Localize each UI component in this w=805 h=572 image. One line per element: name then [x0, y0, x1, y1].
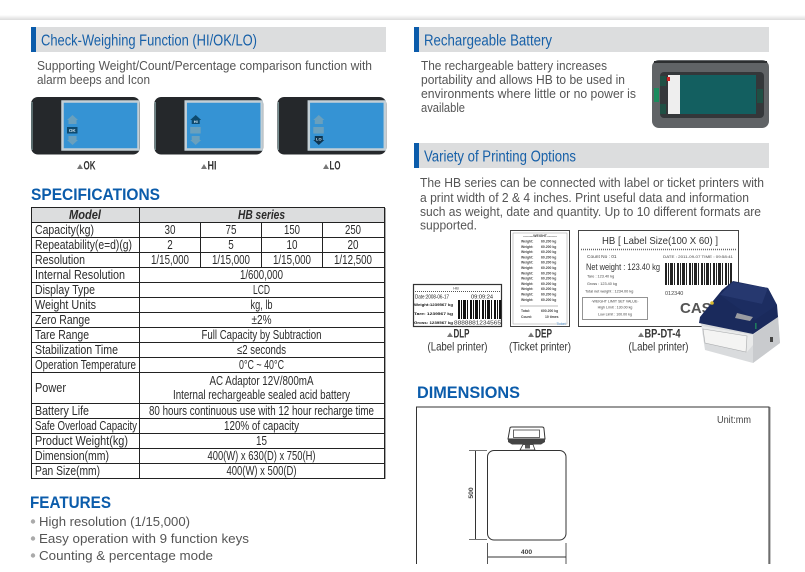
row: resolution: 1/12,500: [334, 253, 372, 267]
row: capacity: [35, 223, 361, 237]
sample: DEP ticket: Weight:: [521, 282, 533, 286]
icon: LO indicator inactive: [67, 136, 78, 145]
text block: battery description: available: [421, 101, 465, 115]
text block: printing description: supported.: [420, 218, 477, 232]
row: power: Internal rechargeable sealed acid battery: [173, 388, 351, 402]
row: stabilization time: ≤2 seconds: [237, 343, 286, 357]
sample: DEP ticket: 600.200 kg: [541, 309, 558, 313]
row: repeatability: 5: [228, 238, 234, 252]
row: display type: Display Type: [35, 283, 95, 297]
row: product weight: 15: [256, 434, 267, 448]
sample: DEP ticket: Weight:: [521, 266, 533, 270]
sample: DEP ticket: [510, 230, 570, 326]
text block: battery description: portability and allows HB to be used in: [421, 73, 625, 87]
sample: HB label: DATE : 2011-09-07 TIME : 09:58:41: [663, 255, 733, 259]
sample: DEP ticket: ---------WEIGHT---------: [523, 234, 557, 238]
sample: DEP ticket: 60.200 kg: [541, 266, 556, 270]
text block: printing description: [420, 176, 764, 232]
row: product weight: Product Weight(kg): [35, 434, 128, 448]
caption: DEP: DEP: [535, 326, 552, 340]
text block: check-weighing description: [37, 59, 372, 87]
sample: DEP ticket: Weight:: [521, 245, 533, 249]
row: repeatability: 10: [286, 238, 298, 252]
row: safe overload capacity: Safe Overload Capacity: [35, 419, 138, 433]
sample: DEP ticket: 60.200 kg: [541, 287, 556, 291]
caption: BP-DT-4: (Label printer): [628, 340, 689, 354]
sample: DEP ticket: Weight:: [521, 287, 533, 291]
sample: HB label: CAS: [680, 300, 712, 317]
row: battery life: [35, 404, 374, 418]
row: power: Power: [35, 381, 66, 395]
icon: OK indicator inactive: [313, 127, 324, 134]
row: safe overload capacity: 120% of capacity: [224, 419, 300, 433]
sample: HB label: [578, 230, 738, 326]
sample: DEP ticket: Weight:: [521, 298, 533, 302]
icon: LO indicator active: LO: [316, 136, 322, 142]
table header row: Model: [69, 208, 101, 222]
sample: DEP ticket: 60.200 kg: [541, 261, 556, 265]
sample: DEP ticket: 60.200 kg: [541, 282, 556, 286]
row: capacity: 30: [164, 223, 176, 237]
sample: HB label: High Limit : 130.00 kg: [598, 306, 632, 310]
caption: HI: [201, 158, 216, 172]
heading: variety of printing options: [414, 143, 769, 168]
sample: DEP ticket: Ticket: [556, 322, 566, 326]
row: pan size: [35, 464, 296, 478]
row: resolution: 1/15,000: [273, 253, 311, 267]
heading: check-weighing function: Check-Weighing Function (HI/OK/LO): [41, 32, 257, 50]
row: internal resolution: [35, 268, 283, 282]
row: internal resolution: Internal Resolution: [35, 268, 125, 282]
row: power: AC Adaptor 12V/800mA: [210, 374, 314, 388]
heading: specifications: SPECIFICATIONS: [31, 186, 160, 204]
row: repeatability: 2: [167, 238, 173, 252]
sample: DLP label: Gross: 1239567 kg: [414, 320, 454, 325]
row: dimension: [35, 449, 316, 463]
scale pan outline: [488, 450, 566, 540]
heading: rechargeable battery: Rechargeable Battery: [424, 32, 552, 50]
sample: DLP label: Date:2008-06-17: [415, 294, 449, 300]
list: features: Counting & percentage mode: [39, 549, 213, 563]
icon: OK indicator active: OK: [69, 128, 76, 133]
caption: OK: [77, 158, 96, 172]
caption: DEP: (Ticket printer): [509, 340, 571, 354]
row: resolution: 1/15,000: [151, 253, 189, 267]
sample: HB label: HB [ Label Size(100 X 60) ]: [602, 235, 718, 247]
sample: DEP ticket: Weight:: [521, 255, 533, 259]
row: capacity: Capacity(kg): [35, 223, 94, 237]
sample: DEP ticket: 60.200 kg: [541, 245, 556, 249]
row: resolution: [35, 253, 372, 267]
sample: DLP label: Tare: 1239567 kg: [414, 311, 454, 316]
row: capacity: 75: [226, 223, 237, 237]
text block: printing description: The HB series can be connected with label or ticket printers with: [420, 176, 764, 190]
row: pan size: Pan Size(mm): [35, 464, 100, 478]
sample: HB label: Net weight : 123.40 kg: [586, 262, 660, 272]
specifications table: [31, 207, 386, 479]
row: repeatability: Repeatability(e=d)(g): [35, 238, 132, 252]
caption: OK: OK: [84, 158, 96, 172]
sample: DEP ticket: Weight:: [521, 250, 533, 254]
text block: printing description: a print width of 2 & 4 inches. Print useful data and information: [420, 191, 749, 205]
icon: HI indicator inactive: [67, 115, 78, 124]
sample: DEP ticket: 60.200 kg: [541, 277, 556, 281]
row: resolution: 1/15,000: [212, 253, 250, 267]
caption: HI: HI: [208, 158, 216, 172]
table header row: HB series: [238, 208, 285, 222]
caption: LO: [323, 158, 340, 172]
caption: BP-DT-4: BP-DT-4: [644, 326, 681, 340]
text block: battery description: [421, 59, 636, 115]
image: label printer: [699, 281, 780, 363]
sample: DEP ticket: 60.200 kg: [541, 298, 556, 302]
caption: DEP: [509, 326, 571, 354]
icon: indicator head: [508, 427, 545, 450]
dimension: 400 width: [488, 543, 566, 564]
row: product weight: [35, 434, 267, 448]
row: pan size: 400(W) x 500(D): [226, 464, 296, 478]
panel: OK display: [31, 97, 140, 154]
row: tare range: [35, 328, 322, 342]
image: battery compartment: [652, 60, 769, 128]
icon: HI indicator active: HI: [194, 119, 198, 124]
row: tare range: Full Capacity by Subtraction: [202, 328, 322, 342]
sample: HB label: Low Limit : 100.00 kg: [598, 312, 632, 316]
sample: DLP label: 09:09:24: [471, 294, 494, 300]
dimension: 500 depth: [468, 450, 487, 540]
text block: printing description: such as weight, date and quantity. Up to 10 different formats are: [420, 205, 761, 219]
row: stabilization time: [35, 343, 286, 357]
row: operation temperature: 0°C ~ 40°C: [239, 358, 284, 372]
caption: BP-DT-4: [628, 326, 689, 354]
sample: DEP ticket: 60.200 kg: [541, 271, 556, 275]
sample: HB label: Count No : 01: [587, 254, 617, 260]
row: capacity: 250: [345, 223, 361, 237]
row: repeatability: 20: [348, 238, 359, 252]
sample: DEP ticket: 60.200 kg: [541, 292, 556, 296]
sample: DEP ticket: Weight:: [521, 261, 533, 265]
row: display type: [35, 283, 270, 297]
sample: DEP ticket: Weight:: [521, 277, 533, 281]
row: weight units: [35, 298, 273, 312]
row: operation temperature: Operation Temperature: [35, 358, 136, 372]
row: zero range: [35, 313, 272, 327]
row: safe overload capacity: [35, 419, 300, 433]
caption: DLP: [428, 326, 488, 354]
table header row: [69, 208, 285, 222]
row: weight units: Weight Units: [35, 298, 96, 312]
row: resolution: Resolution: [35, 253, 85, 267]
panel: HI display: [154, 97, 263, 154]
row: weight units: kg, lb: [250, 298, 273, 312]
row: repeatability: [35, 238, 359, 252]
row: display type: LCD: [253, 283, 270, 297]
sample: DEP ticket: 60.200 kg: [541, 255, 556, 259]
caption: LO: LO: [330, 158, 340, 172]
sample: DEP ticket: Total:: [521, 309, 530, 313]
sample: DEP ticket: Weight:: [521, 271, 533, 275]
row: operation temperature: [35, 358, 284, 372]
row: stabilization time: Stabilization Time: [35, 343, 118, 357]
text block: battery description: environments where little or no power is: [421, 87, 636, 101]
sample: DEP ticket: 60.200 kg: [541, 240, 556, 244]
row: dimension: 400(W) x 630(D) x 750(H): [208, 449, 316, 463]
heading: variety of printing options: Variety of Printing Options: [424, 148, 576, 166]
unit label: Unit:mm: [717, 414, 751, 426]
row: tare range: Tare Range: [35, 328, 89, 342]
sample: DEP ticket: 60.200 kg: [541, 250, 556, 254]
icon: LO indicator inactive: [190, 136, 201, 145]
text block: check-weighing description: Supporting Weight/Count/Percentage comparison function with: [37, 59, 372, 73]
heading: features: FEATURES: [30, 494, 111, 512]
row: battery life: 80 hours continuous use with 12 hour recharge time: [149, 404, 374, 418]
caption: DLP: (Label printer): [428, 340, 488, 354]
row: capacity: 150: [284, 223, 300, 237]
sample: DLP label: HB: [453, 286, 459, 290]
text block: battery description: The rechargeable battery increases: [421, 59, 607, 73]
row: zero range: ±2%: [252, 313, 272, 327]
panel: dimension drawing: [416, 407, 771, 564]
sample: DLP label: [414, 284, 502, 326]
heading: check-weighing function: [31, 27, 386, 52]
list: features: [31, 515, 249, 563]
sample: DLP label: 8888881234565: [454, 320, 501, 326]
list: features: Easy operation with 9 function keys: [39, 532, 249, 546]
dimension: 400 width: 400: [521, 549, 532, 556]
icon: OK indicator inactive: [190, 127, 201, 134]
dimension: 500 depth: 500: [468, 487, 475, 499]
sample: HB label: Total net weight : 1234.00 kg: [585, 290, 633, 294]
list: features: High resolution (1/15,000): [39, 515, 190, 529]
text block: check-weighing description: alarm beeps and Icon: [37, 73, 150, 87]
row: dimension: Dimension(mm): [35, 449, 109, 463]
caption: DLP: DLP: [454, 326, 470, 340]
sample: HB label: Gross : 123.40 kg: [587, 282, 617, 286]
heading: dimensions: DIMENSIONS: [417, 384, 520, 402]
row: power: [35, 374, 351, 402]
row: internal resolution: 1/600,000: [240, 268, 283, 282]
row: zero range: Zero Range: [35, 313, 90, 327]
heading: rechargeable battery: [414, 27, 769, 52]
sample: HB label: Tare : 123.40 kg: [587, 274, 614, 278]
sample: DEP ticket: Weight:: [521, 292, 533, 296]
sample: DEP ticket: 10 times: [545, 315, 559, 319]
icon: HI indicator inactive: [313, 115, 324, 124]
row: battery life: Battery Life: [35, 404, 89, 418]
panel: LO display: [277, 97, 386, 154]
sample: DEP ticket: Weight:: [521, 240, 533, 244]
sample: HB label: -WEIGHT LIMIT SET VALUE-: [591, 300, 639, 304]
sample: DEP ticket: Count:: [521, 315, 532, 319]
sample: HB label: 012340: [665, 291, 683, 297]
sample: DLP label: Weight:1239567 kg: [414, 302, 454, 307]
